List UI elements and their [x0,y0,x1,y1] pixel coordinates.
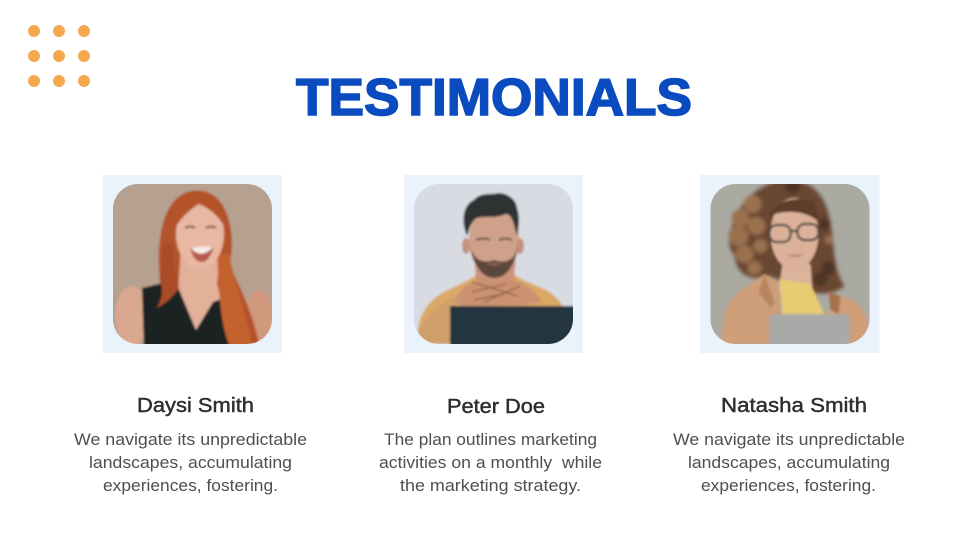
quote: Peter Doe [379,430,602,495]
quote: Daysi Smith: experiences, fostering. [103,476,278,495]
photo frame: Peter Doe [404,175,583,353]
testimonial card: Natasha Smith [673,175,905,495]
name: Daysi Smith: Daysi Smith [137,395,254,417]
quote: Daysi Smith: We navigate its unpredictable [74,430,307,449]
testimonial card: Daysi Smith [74,175,307,495]
quote: Peter Doe: The plan outlines marketing [384,430,597,449]
decorative dot grid [28,25,90,87]
quote: Daysi Smith: landscapes, accumulating [89,453,292,472]
name: Natasha Smith: Natasha Smith [721,395,867,417]
quote: Peter Doe: the marketing strategy. [400,476,581,495]
testimonial card: Peter Doe [379,175,602,495]
quote: Natasha Smith: landscapes, accumulating [688,453,890,472]
quote: Peter Doe: activities on a monthly while [379,453,602,472]
quote: Daysi Smith [74,430,307,495]
title: TESTIMONIALS [296,69,692,127]
quote: Natasha Smith [673,430,905,495]
quote: Natasha Smith: We navigate its unpredictable [673,430,905,449]
name: Peter Doe: Peter Doe [447,396,545,418]
quote: Natasha Smith: experiences, fostering. [701,476,876,495]
photo frame: Natasha Smith [700,175,880,354]
photo frame: Daysi Smith [103,175,282,353]
